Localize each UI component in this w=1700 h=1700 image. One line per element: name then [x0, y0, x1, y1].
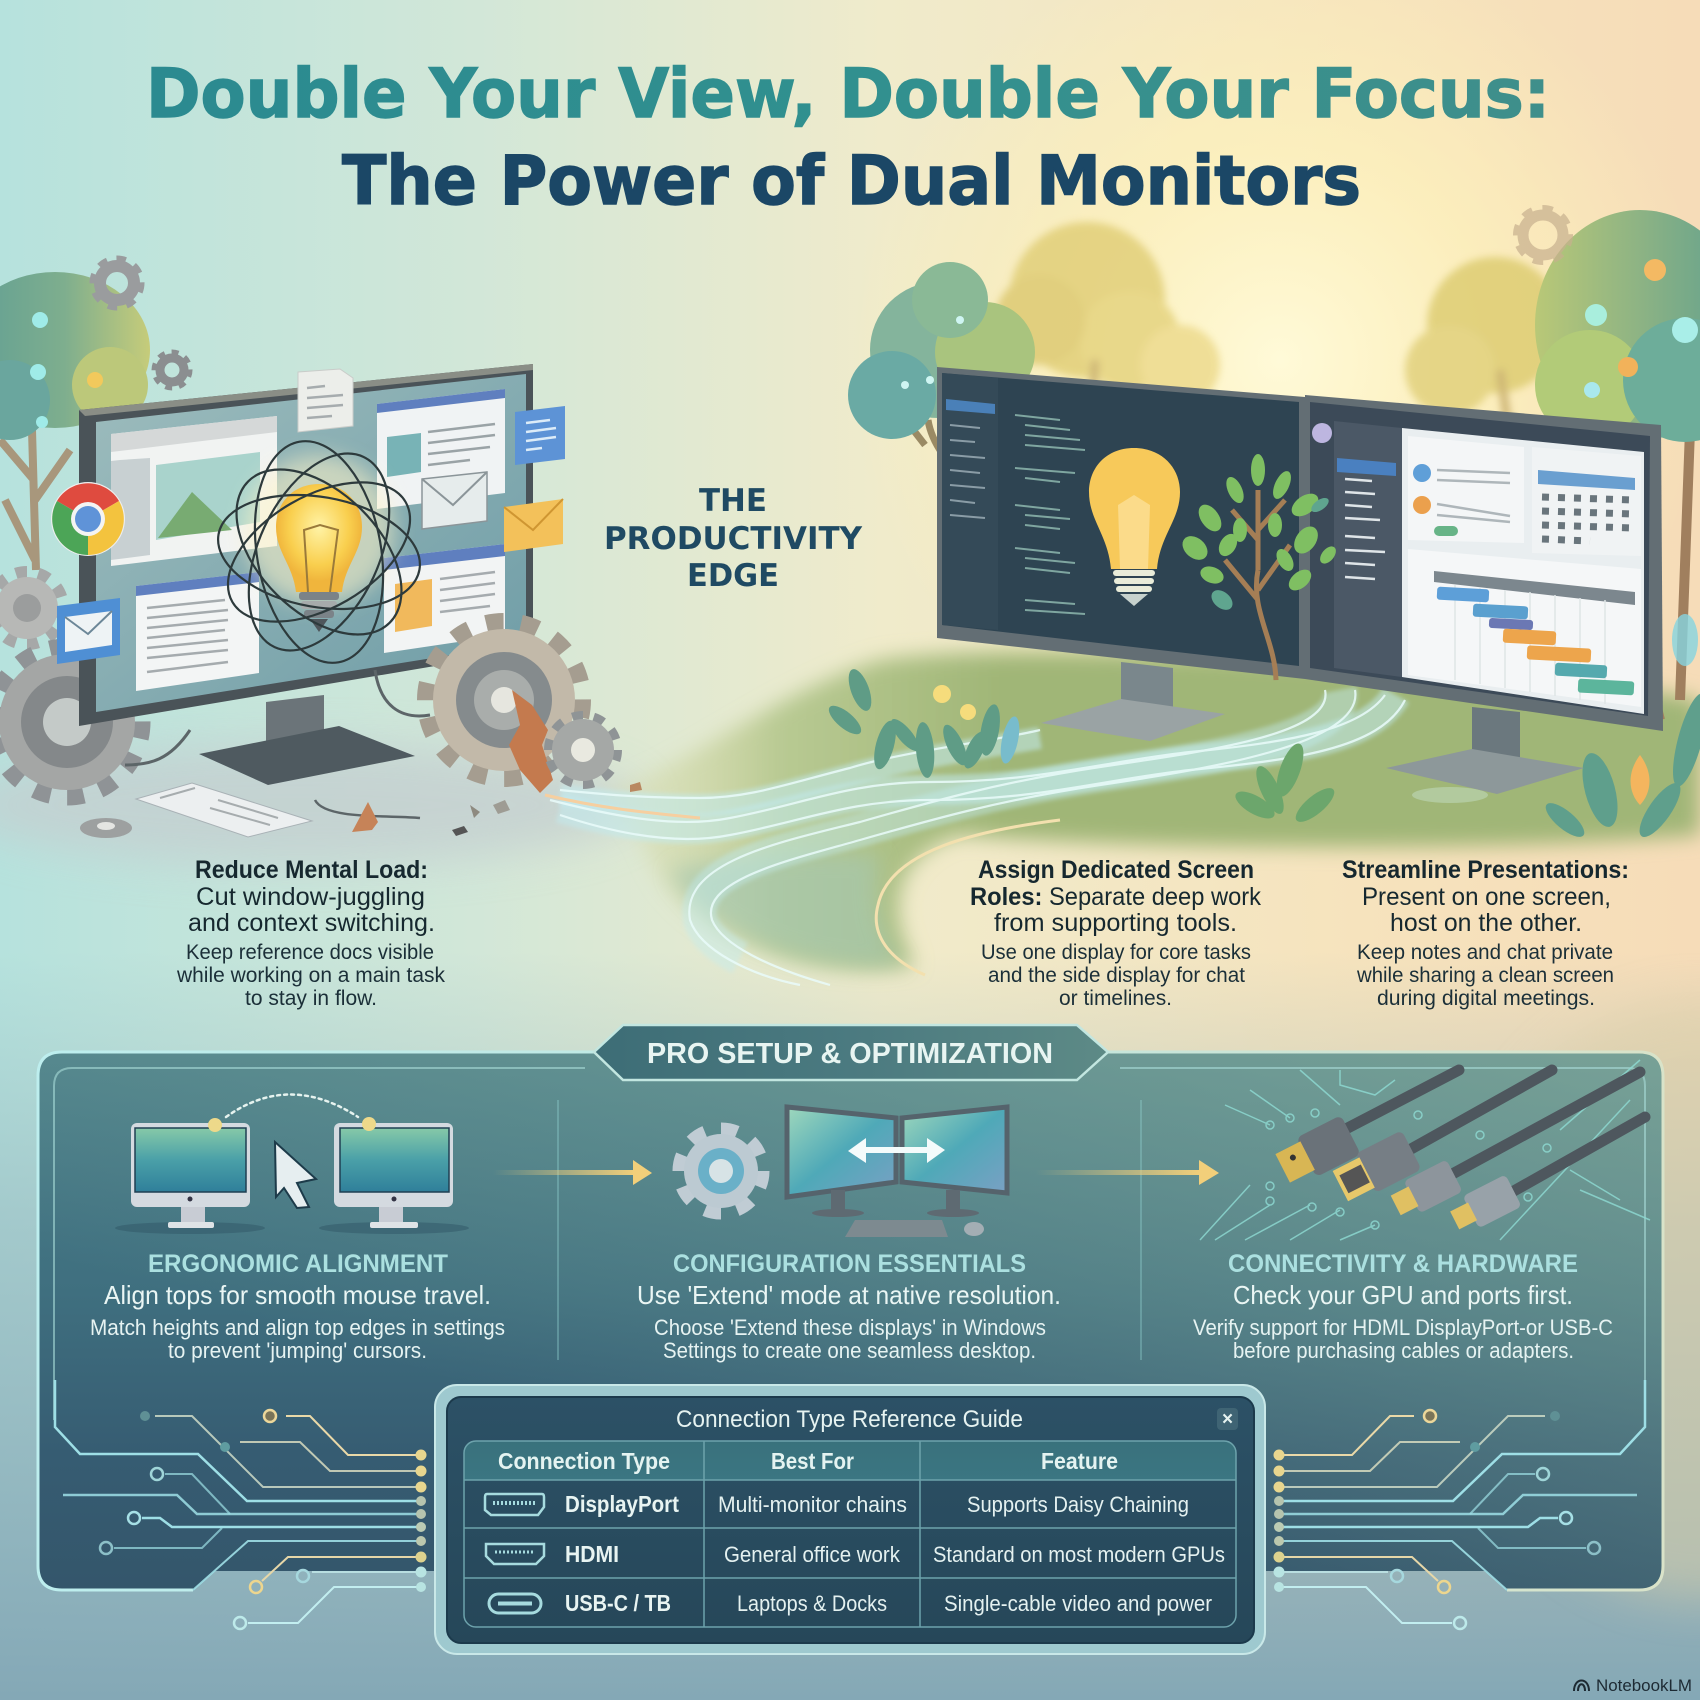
icon: document — [298, 369, 353, 432]
caption: assign dedicated screen roles — [970, 856, 1261, 1010]
text: ergonomic alignment: ERGONOMIC ALIGNMENT — [148, 1250, 448, 1278]
text: ergonomic alignment: Align tops for smooth mouse travel. — [104, 1280, 491, 1310]
guide title: Connection Type Reference Guide — [676, 1406, 1023, 1433]
caption: streamline presentations: Keep notes and chat private — [1357, 941, 1613, 964]
arrow: step 1 to step 2 — [493, 1160, 652, 1185]
caption: streamline presentations: while sharing a clean screen — [1356, 964, 1614, 987]
icon: blue mail — [57, 598, 120, 664]
card: communication — [1408, 436, 1524, 543]
circuit traces: left — [55, 1380, 426, 1629]
icon: settings gear and extended displays — [679, 1107, 1007, 1237]
caption: assign dedicated screen roles: Use one display for core tasks — [981, 941, 1251, 964]
text: ergonomic alignment: to prevent 'jumping' cursors. — [168, 1338, 427, 1363]
growing tree — [1178, 454, 1339, 680]
close button: × — [1222, 1409, 1233, 1430]
heading: the productivity edge: EDGE — [687, 558, 779, 594]
caption: streamline presentations: during digital meetings. — [1377, 987, 1595, 1010]
caption: reduce mental load: and context switching. — [188, 909, 435, 937]
row: hdmi: HDMI — [565, 1541, 619, 1567]
text: connectivity and hardware: before purchasing cables or adapters. — [1233, 1338, 1574, 1363]
illustration: dual monitors — [937, 367, 1663, 794]
text: connectivity and hardware — [1193, 1250, 1613, 1363]
card: calendar — [1532, 447, 1641, 556]
monitor frame — [79, 364, 533, 726]
heading tab: PRO SETUP & OPTIMIZATION — [647, 1038, 1053, 1070]
close button — [1217, 1408, 1238, 1430]
row: hdmi: General office work — [724, 1542, 901, 1567]
table header: Best For — [771, 1448, 854, 1474]
row: usb-c: Single-cable video and power — [944, 1591, 1212, 1616]
caption: reduce mental load: Reduce Mental Load: — [195, 856, 428, 884]
caption: assign dedicated screen roles: from supporting tools. — [994, 909, 1237, 937]
caption: streamline presentations — [1342, 856, 1629, 1010]
text: ergonomic alignment: Match heights and align top edges in settings — [90, 1315, 505, 1340]
caption: reduce mental load: while working on a main task — [176, 964, 445, 987]
broken gears — [125, 624, 617, 793]
text: connectivity and hardware: Verify support for HDML DisplayPort-or USB-C — [1193, 1315, 1613, 1340]
title: The Power of Dual Monitors — [342, 142, 1361, 221]
caption: assign dedicated screen roles: Assign Dedicated Screen — [978, 856, 1254, 884]
stand — [266, 695, 324, 748]
heading: the productivity edge: THE — [699, 483, 767, 519]
caption: streamline presentations: Streamline Presentations: — [1342, 856, 1629, 884]
icon: lightbulb in tangled lines — [204, 431, 434, 673]
icon: white envelope — [422, 472, 487, 529]
table header: Connection Type — [498, 1448, 670, 1474]
caption: assign dedicated screen roles: Roles: Separate deep work — [970, 883, 1261, 911]
illustration: left monitor with clutter — [0, 260, 642, 838]
caption: streamline presentations: Present on one screen, — [1362, 883, 1611, 911]
heading: the productivity edge: PRODUCTIVITY — [604, 521, 863, 557]
caption: reduce mental load: to stay in flow. — [245, 987, 377, 1010]
windows — [111, 389, 505, 691]
panel: connection type reference guide — [435, 1385, 1265, 1654]
panel: pro setup and optimization — [38, 1025, 1663, 1590]
text: configuration essentials — [637, 1250, 1061, 1363]
card: progress gantt — [1408, 549, 1641, 707]
caption: reduce mental load — [176, 856, 445, 1010]
illustration: background trees and gears, right — [848, 210, 1700, 720]
title: Double Your View, Double Your Focus: — [146, 55, 1550, 134]
title — [146, 55, 1550, 221]
heading: the productivity edge — [604, 483, 863, 594]
row: displayport: Multi-monitor chains — [718, 1492, 907, 1517]
caption: reduce mental load: Cut window-juggling — [196, 883, 425, 911]
row: usb-c: USB-C / TB — [565, 1590, 671, 1616]
left-side gears — [0, 572, 141, 796]
caption: assign dedicated screen roles: and the side display for chat — [988, 964, 1245, 987]
icon: browser logo — [51, 482, 125, 556]
heading tab — [594, 1025, 1108, 1080]
icon: yellow envelope — [504, 499, 563, 552]
watermark: NotebookLM — [1596, 1676, 1692, 1695]
text: configuration essentials: Choose 'Extend these displays' in Windows — [654, 1315, 1046, 1340]
icon: aligned monitors with cursor — [115, 1094, 469, 1234]
right monitor — [1305, 395, 1663, 731]
text: configuration essentials: Settings to create one seamless desktop. — [663, 1338, 1036, 1363]
flowing stream of light — [545, 690, 1405, 985]
row: hdmi — [486, 1541, 1225, 1567]
text: connectivity and hardware: Check your GPU and ports first. — [1233, 1280, 1573, 1310]
row: usb-c — [489, 1590, 1212, 1616]
text: connectivity and hardware: CONNECTIVITY & HARDWARE — [1228, 1250, 1578, 1278]
left monitor — [937, 367, 1305, 679]
table header: Feature — [1041, 1448, 1118, 1474]
table header — [498, 1448, 1118, 1474]
circuit traces: right — [1274, 1380, 1645, 1629]
scattered papers and debris — [80, 782, 642, 838]
text: configuration essentials: CONFIGURATION ESSENTIALS — [673, 1250, 1026, 1278]
icon: blue document — [515, 406, 565, 465]
caption: reduce mental load: Keep reference docs visible — [186, 941, 434, 964]
row: displayport — [485, 1491, 1189, 1517]
left tree and gears — [0, 260, 189, 570]
caption: streamline presentations: host on the other. — [1390, 909, 1582, 937]
text: ergonomic alignment — [90, 1250, 505, 1363]
illustration: ground plants, right — [825, 614, 1700, 843]
arrow: step 2 to step 3 — [1036, 1160, 1219, 1185]
row: usb-c: Laptops & Docks — [737, 1591, 887, 1616]
stands — [1041, 662, 1584, 794]
caption: assign dedicated screen roles: or timelines. — [1059, 987, 1172, 1010]
text: configuration essentials: Use 'Extend' mode at native resolution. — [637, 1280, 1061, 1310]
row: displayport: DisplayPort — [565, 1491, 679, 1517]
comparison table — [464, 1441, 1236, 1627]
row: hdmi: Standard on most modern GPUs — [933, 1542, 1225, 1567]
icon: cables and circuit traces — [1200, 1060, 1650, 1240]
row: displayport: Supports Daisy Chaining — [967, 1492, 1189, 1517]
